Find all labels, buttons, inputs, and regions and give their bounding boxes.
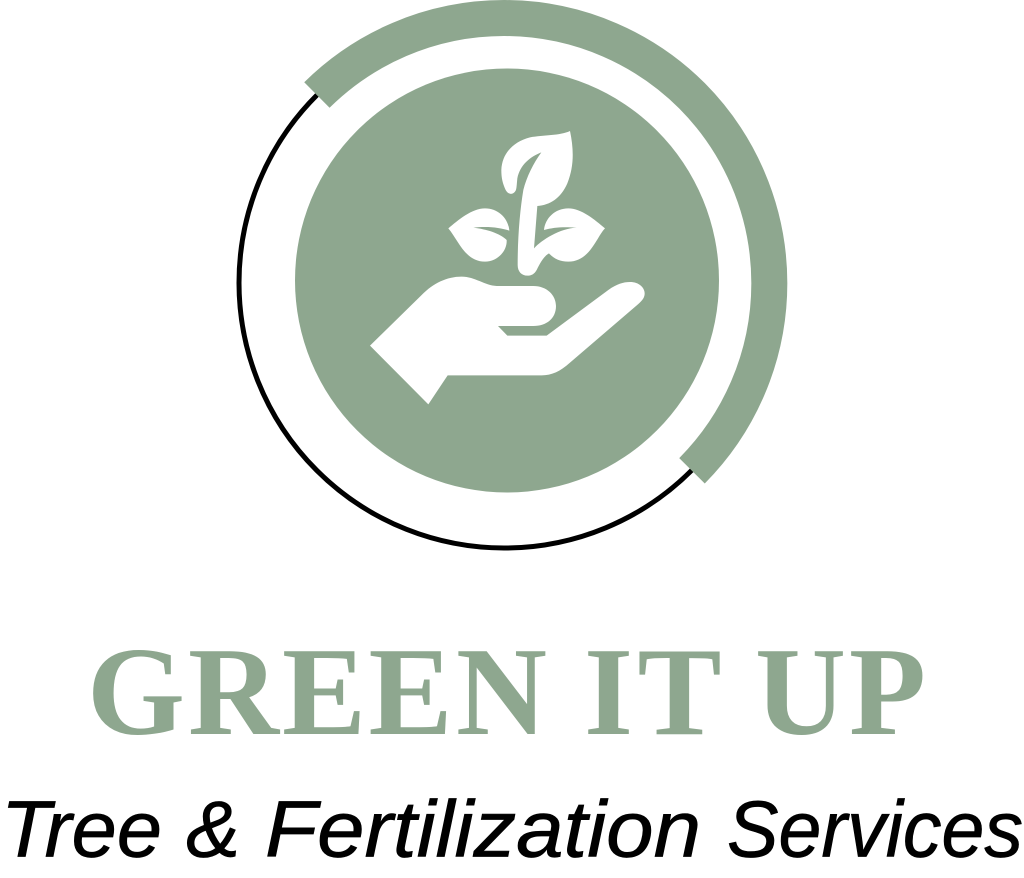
green thick ring arc (317, 18, 769, 471)
icon: top leaf, stem and right leaf (501, 131, 605, 276)
title: GREEN IT UP (87, 623, 926, 762)
subtitle: Fertilization (265, 784, 701, 874)
inner green disc (295, 68, 719, 492)
icon: hand (370, 277, 645, 404)
icon: left leaf (448, 208, 509, 262)
subtitle (1, 784, 1023, 874)
subtitle: & (186, 784, 240, 874)
black thin ring arc (239, 95, 692, 548)
icon: hand holding sprout (370, 131, 645, 404)
subtitle: Tree (1, 784, 162, 874)
